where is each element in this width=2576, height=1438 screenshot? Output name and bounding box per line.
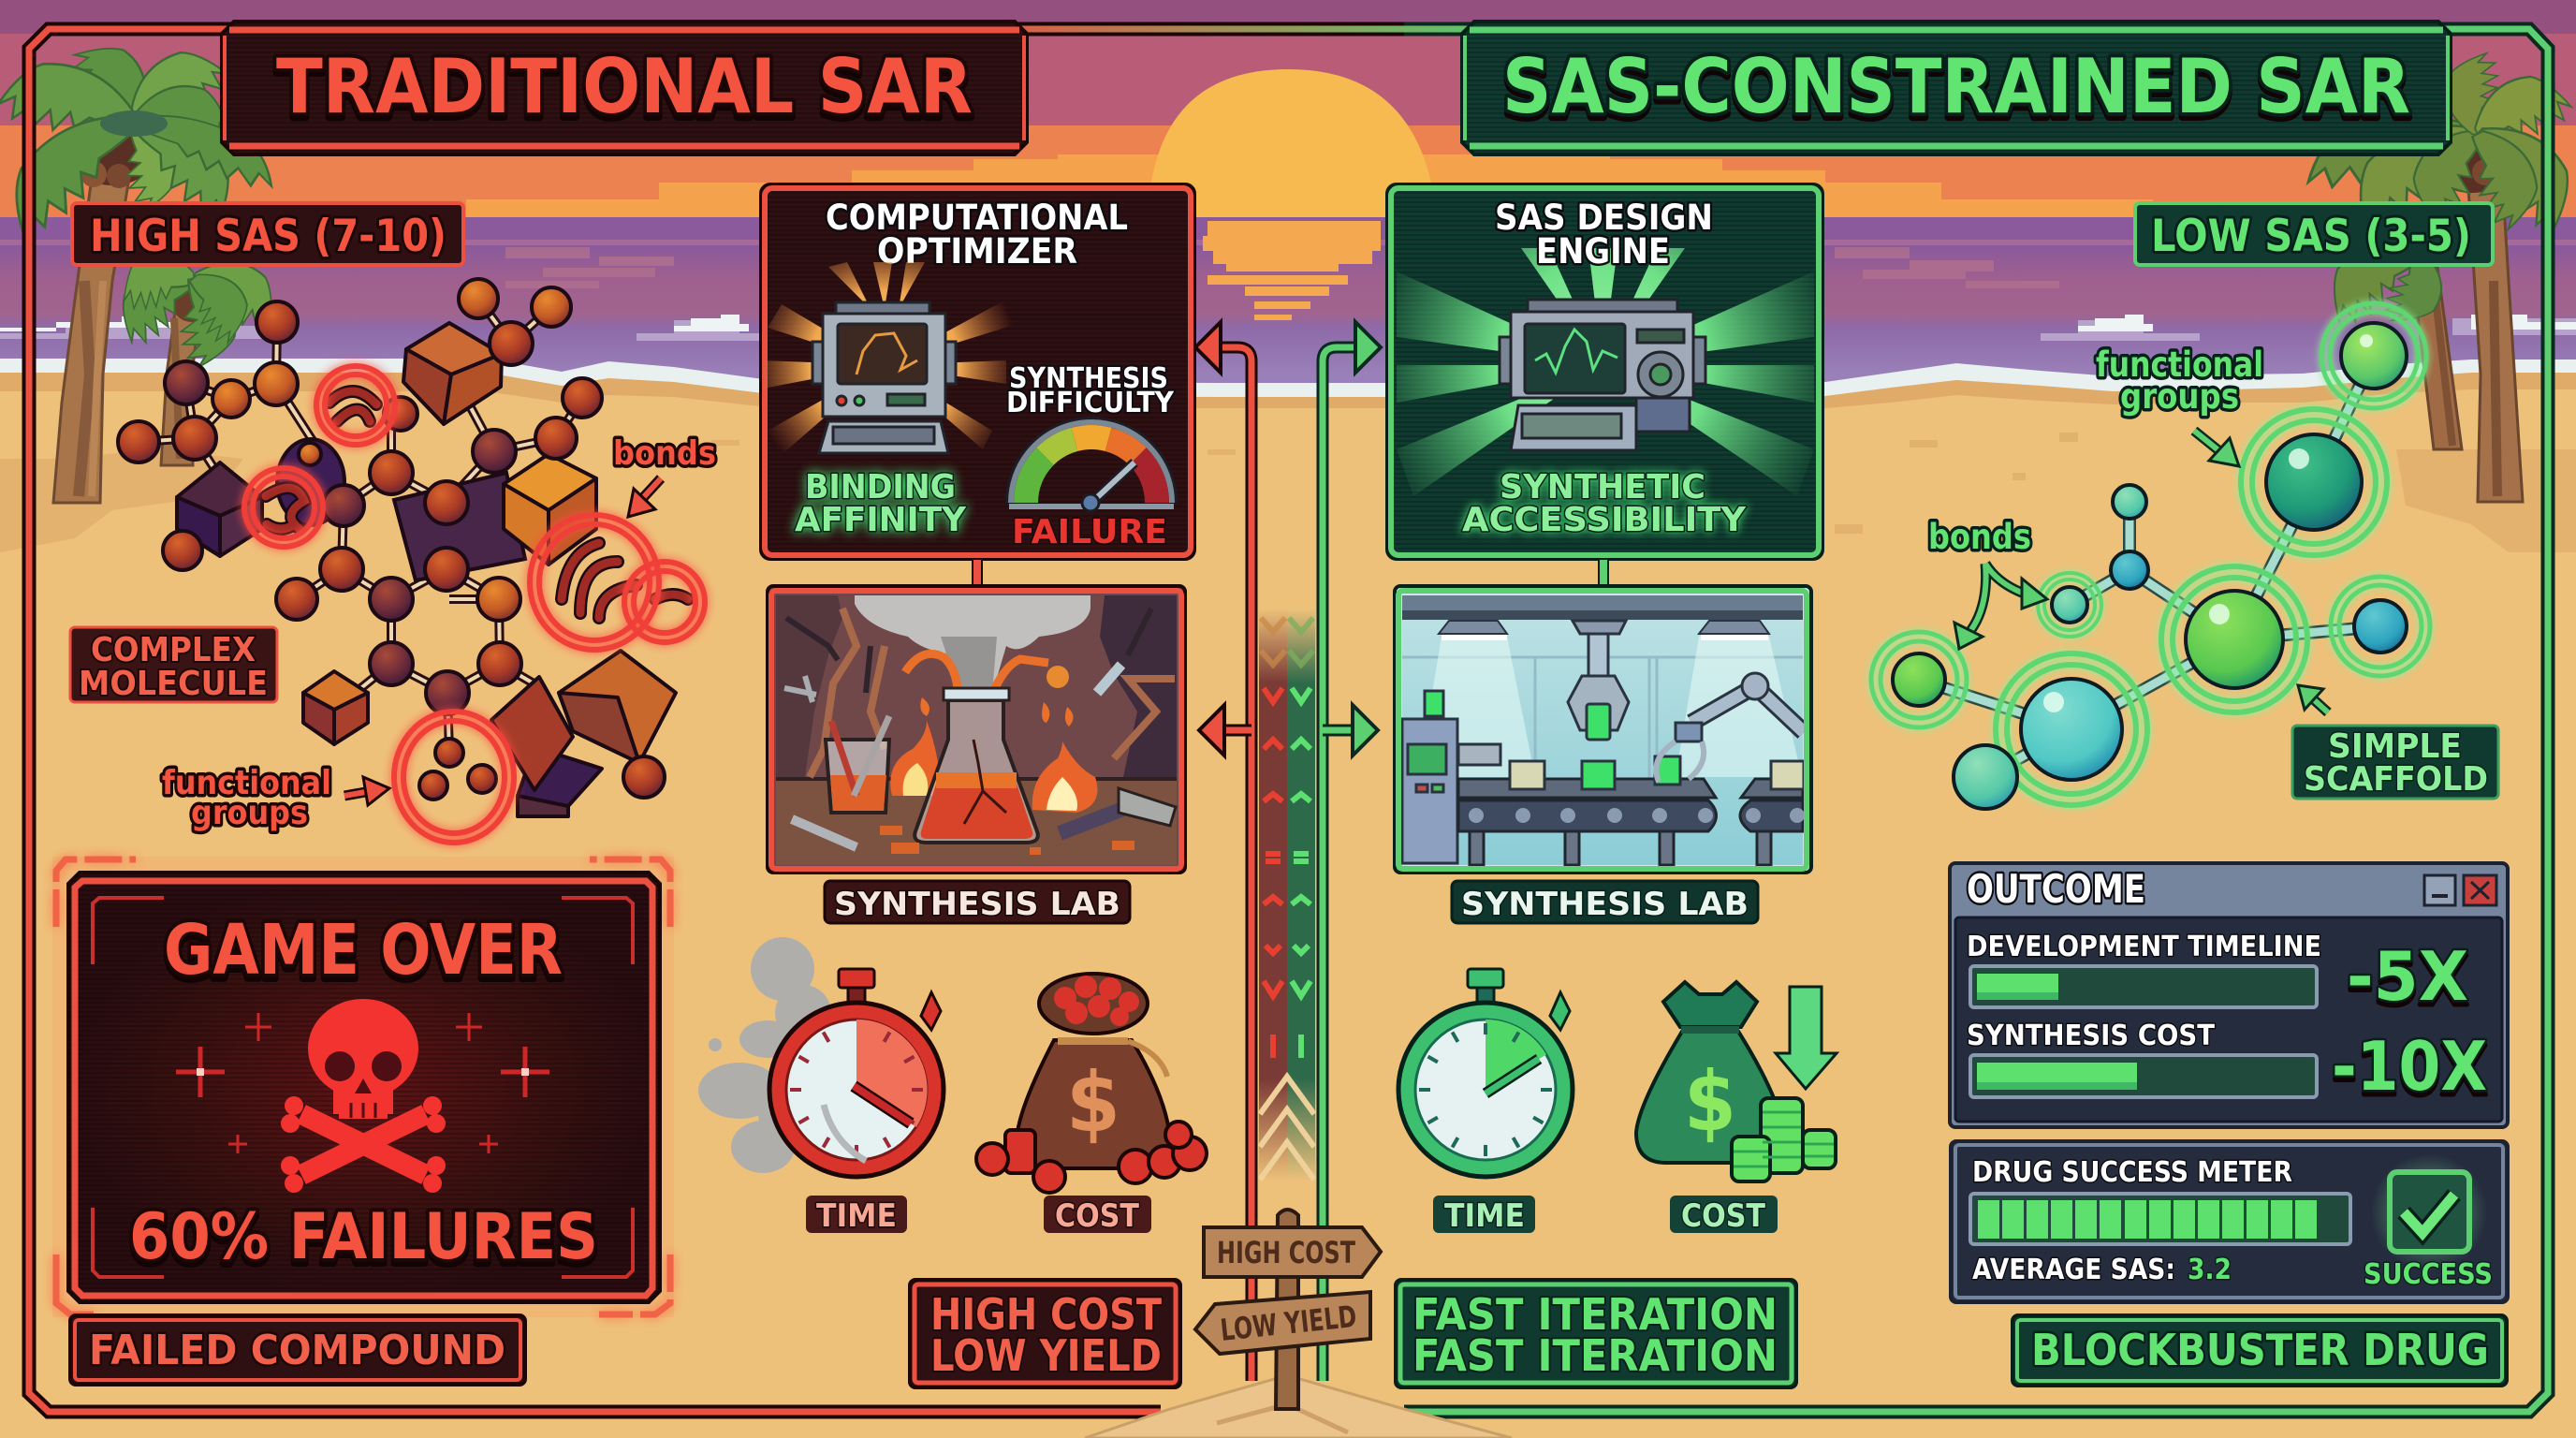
glow brackets <box>56 859 670 1314</box>
polyhedra <box>177 323 676 816</box>
annotation: bonds (red) <box>613 434 716 517</box>
bonds <box>139 299 582 753</box>
callout: high cost low yield <box>910 1280 1180 1387</box>
label: blockbuster drug <box>2012 1315 2507 1386</box>
gauge: synthesis difficulty <box>1009 422 1174 511</box>
robot gripper <box>1568 621 1629 740</box>
arrow: to scaffold <box>2298 685 2328 712</box>
metric: synthesis difficulty: SYNTHESIS <box>1009 362 1168 395</box>
conveyor <box>1458 779 1803 865</box>
panel: drug success meter <box>1951 1141 2508 1302</box>
icon: green stopwatch <box>1398 969 1573 1177</box>
icon: green money bag with coins and down arrow: $ <box>1684 1053 1736 1150</box>
metric: synthesis cost: -10X <box>2332 1027 2487 1106</box>
debris <box>880 826 1134 855</box>
sign: high cost <box>1204 1227 1381 1277</box>
panel: game over <box>52 857 674 1317</box>
simple molecule illustration <box>1871 303 2430 809</box>
title: SAS-constrained SAR <box>1462 22 2451 154</box>
label: blockbuster drug: BLOCKBUSTER DRUG <box>2031 1325 2489 1375</box>
annotation: functional groups (green): functional <box>2096 345 2263 385</box>
annotation: bonds (red): bonds <box>613 434 716 473</box>
callout: fast iteration <box>1396 1280 1796 1387</box>
palm trees right <box>2300 52 2576 502</box>
metric: development timeline: -5X <box>2347 937 2468 1016</box>
panel: drug success meter: AVERAGE SAS: <box>1972 1254 2175 1286</box>
icon: sand pile <box>1085 1375 1512 1438</box>
complex molecule illustration <box>118 279 705 843</box>
ceiling truss <box>1402 595 1803 620</box>
heading <box>826 198 1128 271</box>
callout: high cost low yield: LOW YIELD <box>930 1330 1162 1381</box>
icon: setting sun <box>1148 69 1437 219</box>
metric: development timeline <box>1967 931 2468 1016</box>
heading: COMPUTATIONAL <box>826 198 1128 238</box>
icon: red money bag: $ <box>1066 1054 1120 1151</box>
panel: outcome window <box>1950 863 2508 1127</box>
wet sand <box>0 373 2576 440</box>
window title: OUTCOME <box>1967 866 2145 912</box>
icon: flames <box>890 697 1097 813</box>
sign: low yield: LOW YIELD <box>1219 1299 1358 1348</box>
panel: computational optimizer <box>761 184 1194 559</box>
label: low SAS: LOW SAS (3-5) <box>2151 211 2471 262</box>
icon: cracked flask <box>915 688 1038 843</box>
atoms <box>1893 323 2407 809</box>
factory machine <box>1402 691 1500 863</box>
arrow: red traditional pathway <box>1195 322 1251 1381</box>
annotation: functional groups (red) <box>162 764 389 832</box>
signpost <box>1195 1210 1381 1409</box>
robot arm <box>1656 673 1804 782</box>
heading: ENGINE <box>1536 231 1670 271</box>
label: complex molecule <box>70 627 277 703</box>
wall shadows <box>776 595 842 777</box>
annotation: functional groups (red): groups <box>191 794 308 832</box>
panel: drug success meter: SUCCESS <box>2364 1258 2493 1291</box>
sign: low yield <box>1195 1292 1370 1354</box>
label: simple scaffold: SIMPLE <box>2328 727 2462 766</box>
smoke cloud <box>855 595 1090 694</box>
back palm <box>105 248 286 465</box>
falling tools <box>1097 665 1121 693</box>
containers on belt <box>1510 756 1804 789</box>
metric: binding affinity <box>795 468 967 539</box>
callout: fast iteration: FAST ITERATION <box>1412 1289 1778 1340</box>
metric: synthesis cost <box>1967 1020 2487 1106</box>
panel: failing synthesis lab <box>768 586 1185 873</box>
heading <box>1495 198 1713 271</box>
panel: drug success meter: DRUG SUCCESS METER <box>1972 1156 2292 1189</box>
icon: red stopwatch <box>769 969 944 1177</box>
icon: success check <box>2371 1154 2487 1270</box>
label: cost (SAS): COST <box>1681 1197 1766 1235</box>
label: complex molecule: COMPLEX <box>91 631 256 669</box>
annotation: functional groups (green) <box>2096 345 2263 466</box>
light rays <box>1397 248 1814 496</box>
icon: hammer <box>1060 788 1176 833</box>
heading: GAME OVER <box>164 910 563 990</box>
callout: fast iteration: FAST ITERATION <box>1412 1330 1778 1381</box>
panel: drug success meter: 3.2 <box>2188 1254 2232 1286</box>
icon: green money bag with coins and down arrow <box>1636 982 1837 1181</box>
metric: synthetic accessibility <box>1462 468 1747 539</box>
icon: red money bag <box>976 974 1207 1193</box>
shore foam <box>0 359 2576 421</box>
central comparison band <box>1259 609 1315 1181</box>
annotation: bonds (green): bonds <box>1928 517 2031 557</box>
label: high SAS: HIGH SAS (7-10) <box>90 211 446 262</box>
annotation: bonds (green) <box>1928 517 2047 649</box>
panel: SAS design engine <box>1387 184 1822 559</box>
sign: high cost: HIGH COST <box>1217 1235 1355 1270</box>
icon: retro computer <box>812 302 956 453</box>
connector: optimizer to lab <box>973 559 982 587</box>
title: traditional SAR <box>222 22 1027 154</box>
metric: binding affinity: BINDING <box>805 468 956 506</box>
rings <box>1871 303 2430 805</box>
label: failed compound <box>70 1315 525 1385</box>
connector: design engine to lab <box>1599 559 1608 587</box>
metric: synthesis difficulty: DIFFICULTY <box>1006 387 1175 419</box>
heading: SAS DESIGN <box>1495 198 1713 238</box>
metric: development timeline: DEVELOPMENT TIMELINE <box>1967 931 2321 963</box>
icon: skull and crossbones <box>281 999 446 1193</box>
sparkles <box>176 1013 549 1153</box>
label: time (traditional): TIME <box>816 1197 897 1235</box>
conveyor rollers <box>1469 808 1805 823</box>
front palm <box>0 30 285 503</box>
title: SAS-constrained SAR: SAS-CONSTRAINED SAR <box>1502 43 2410 130</box>
icon: retro computer with green display <box>1500 300 1705 450</box>
highlight rings <box>244 366 705 843</box>
wall panels <box>1402 657 1803 805</box>
wall cracks <box>810 609 1175 777</box>
label: failed compound: FAILED COMPOUND <box>89 1327 505 1374</box>
annotation: functional groups (green): groups <box>2120 376 2239 417</box>
label: simple scaffold <box>2292 726 2498 799</box>
label: synthesis lab (traditional): SYNTHESIS LAB <box>834 886 1120 923</box>
meter bar <box>1970 1194 2350 1244</box>
heading: OPTIMIZER <box>877 231 1077 271</box>
label: cost (traditional): COST <box>1055 1197 1140 1235</box>
bonds <box>1919 356 2380 777</box>
squiggles <box>266 391 688 618</box>
arrow: green SAS-constrained pathway <box>1323 322 1381 1381</box>
icon: wrench <box>792 819 856 847</box>
metric: synthesis cost: SYNTHESIS COST <box>1967 1020 2215 1052</box>
metric: binding affinity: AFFINITY <box>795 501 967 539</box>
ceiling lights <box>1418 621 1802 777</box>
icon: beaker with tools <box>826 716 889 813</box>
label: time (SAS): TIME <box>1444 1197 1525 1235</box>
annotation: functional groups (red): functional <box>162 764 331 802</box>
palm trees left <box>0 30 286 503</box>
window buttons <box>2424 875 2496 905</box>
panel: automated synthesis lab <box>1395 586 1811 873</box>
atoms <box>118 279 665 800</box>
metric: synthesis difficulty <box>1006 362 1175 419</box>
callout: high cost low yield: HIGH COST <box>930 1289 1163 1340</box>
metric: synthetic accessibility: SYNTHETIC <box>1500 468 1705 506</box>
failure label: FAILURE <box>1012 513 1167 551</box>
icon: erupting sparks <box>905 653 1048 688</box>
label: synthesis lab (SAS): SYNTHESIS LAB <box>1461 886 1749 923</box>
label: simple scaffold: SCAFFOLD <box>2304 760 2488 799</box>
metric: synthetic accessibility: ACCESSIBILITY <box>1462 501 1747 539</box>
light rays <box>763 262 1020 459</box>
panel: game over: 60% FAILURES <box>129 1200 598 1274</box>
label: complex molecule: MOLECULE <box>79 665 268 703</box>
dark plate <box>394 473 525 580</box>
icon: smoke behind red stopwatch <box>698 937 831 1173</box>
title: traditional SAR: TRADITIONAL SAR <box>276 43 973 130</box>
